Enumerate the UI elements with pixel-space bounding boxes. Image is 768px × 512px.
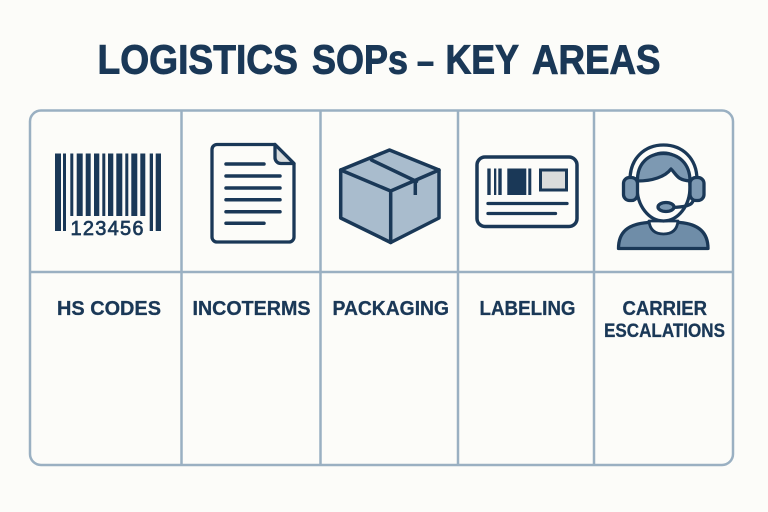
title (98, 36, 660, 82)
title: AREAS (532, 36, 660, 82)
icon: barcode: 123456 (70, 218, 144, 240)
title: – (417, 40, 434, 82)
icon: support agent with headset (618, 145, 708, 248)
icon: barcode (55, 154, 161, 240)
icon: document (212, 144, 294, 242)
icon: cardboard box (341, 150, 439, 242)
label: Carrier escalations (604, 297, 725, 342)
label: Labeling: LABELING (480, 297, 576, 320)
label: Carrier escalations: CARRIER (622, 297, 707, 320)
icon: shipping label (477, 157, 577, 226)
label: Incoterms: INCOTERMS (192, 297, 310, 320)
title: LOGISTICS (98, 36, 298, 82)
table grid (30, 110, 733, 465)
title: SOPs (312, 36, 408, 82)
label: HS codes: HS CODES (57, 297, 161, 320)
title: KEY (446, 36, 519, 82)
label: Packaging: PACKAGING (332, 297, 449, 320)
label: Carrier escalations: ESCALATIONS (604, 321, 725, 342)
